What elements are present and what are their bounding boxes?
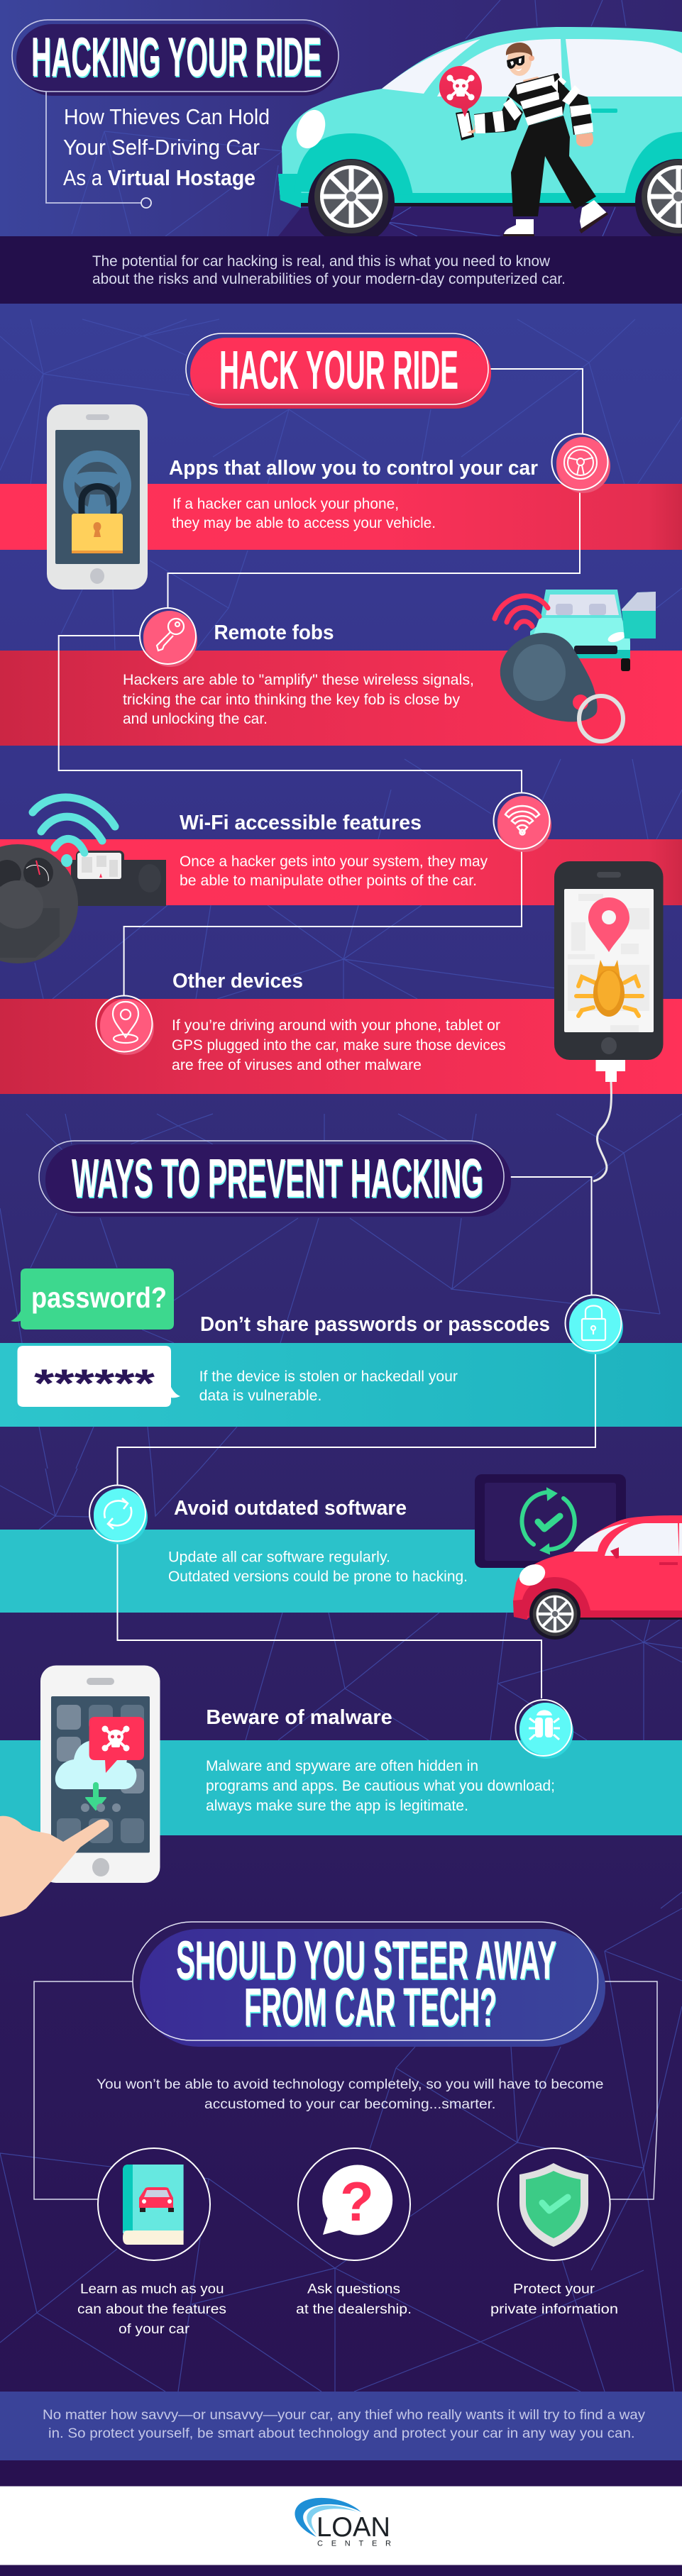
subtitle with bracket line: As a [63, 165, 103, 190]
icon: padlock badge [565, 1295, 623, 1354]
icon: car manual book [98, 2148, 210, 2260]
icon: hidden password bubble [17, 1346, 180, 1407]
text: learn as much as you can: can about the features [77, 2302, 226, 2317]
heading pill: Ways to Prevent Hacking [39, 1141, 511, 1217]
text: learn as much as you can: of your car [119, 2322, 190, 2337]
text: wi-fi accessible features: Wi-Fi accessible features [180, 812, 422, 834]
thief figure with phone [456, 43, 608, 237]
text: car tech intro: accustomed to your car becoming...smarter. [204, 2097, 495, 2112]
text: avoid outdated software: Update all car software regularly. [168, 1549, 390, 1566]
closing strip [0, 2392, 682, 2460]
text: avoid outdated software: Outdated versions could be prone to hacking. [168, 1569, 468, 1585]
text: remote fobs [123, 621, 474, 727]
text: apps that allow you to control your car: they may be able to access your vehicle. [172, 515, 436, 531]
text: beware of malware: Malware and spyware are often hidden in [206, 1758, 478, 1774]
closing strip: No matter how savvy—or unsavvy—your car, any thief who really wants it will try to find a way [43, 2408, 646, 2423]
icon: steering wheel badge [552, 434, 610, 493]
illustration: red car [513, 1515, 682, 1640]
text: protect your private information: Protect your [513, 2282, 595, 2297]
heading pill: Should You Steer Away [133, 1922, 605, 2047]
icon: key badge [140, 608, 197, 667]
band: apps [0, 484, 682, 550]
icon: skull alert balloon [439, 66, 482, 117]
band: malware [0, 1740, 682, 1835]
text: remote fobs: Remote fobs [214, 621, 334, 644]
icon: question speech bubble: ? [340, 2170, 374, 2233]
illustration: update monitor [475, 1474, 626, 1568]
text: apps that allow you to control your car: If a hacker can unlock your phone, [172, 496, 399, 512]
text: remote fobs: tricking the car into thinking the key fob is close by [123, 692, 461, 708]
text: learn as much as you can [77, 2282, 226, 2337]
text: don't share passwords: Don’t share passwords or passcodes [200, 1313, 550, 1336]
connector: prevention path [118, 1177, 595, 1698]
icon: steering wheel phone lock [47, 404, 148, 590]
text: other devices [172, 970, 506, 1073]
text: avoid outdated software [168, 1497, 468, 1585]
text: protect your private information: private information [490, 2302, 618, 2317]
text: learn as much as you can: Learn as much as you [80, 2282, 224, 2297]
icon: hidden password bubble: ****** [34, 1361, 155, 1405]
connector: car tech path [34, 1981, 657, 2199]
text: other devices: are free of viruses and other malware [172, 1057, 422, 1073]
text: beware of malware [206, 1706, 555, 1814]
illustration: dashboard and wifi [0, 797, 166, 963]
text: don't share passwords: data is vulnerable. [199, 1388, 321, 1404]
icon: question speech bubble [298, 2148, 410, 2260]
illustration: car behind key fob [530, 590, 656, 671]
heading pill: Hack Your Ride: HACK YOUR RIDE [219, 340, 458, 401]
text: wi-fi accessible features: Once a hacker gets into your system, they may [180, 853, 488, 870]
text: apps that allow you to control your car [169, 457, 538, 531]
illustration: key fob [500, 633, 623, 741]
footer with Loan Center logo [0, 2486, 682, 2565]
icon: location pin badge [97, 996, 154, 1055]
intro strip [0, 236, 682, 304]
icon: wifi badge [494, 793, 551, 852]
connector: hack your ride path [59, 369, 583, 995]
text: avoid outdated software: Avoid outdated software [174, 1497, 407, 1520]
footer with Loan Center logo: CENTER [317, 2540, 391, 2548]
footer with Loan Center logo: LOAN [317, 2512, 390, 2543]
band: outdated software [0, 1530, 682, 1613]
icon: password speech bubble [11, 1268, 174, 1330]
text: don't share passwords [199, 1313, 550, 1404]
text: wi-fi accessible features [180, 812, 488, 889]
icon: charger and cable [593, 1060, 625, 1181]
title: Hacking Your Ride: HACKING YOUR RIDE [32, 27, 322, 89]
text: car tech intro: You won’t be able to avoid technology completely, so you will have to become [97, 2077, 603, 2092]
text: ask questions: Ask questions [307, 2282, 400, 2297]
icon: password speech bubble: password? [31, 1281, 167, 1314]
subtitle with bracket line: How Thieves Can Hold [64, 104, 270, 129]
text: other devices: Other devices [172, 970, 303, 993]
subtitle with bracket line: Your Self-Driving Car [63, 135, 260, 160]
text: remote fobs: Hackers are able to "amplify" these wireless signals, [123, 672, 474, 688]
text: ask questions: at the dealership. [296, 2302, 412, 2317]
text: ask questions [296, 2282, 412, 2317]
band: wi-fi [0, 839, 682, 905]
illustration: phone with map, pin and bug [554, 861, 663, 1060]
icon: pink wifi signal [495, 596, 548, 628]
text: car tech intro [97, 2077, 603, 2112]
text: protect your private information [490, 2282, 618, 2317]
text: beware of malware: Beware of malware [206, 1706, 392, 1729]
text: remote fobs: and unlocking the car. [123, 711, 268, 727]
band: passwords [0, 1343, 682, 1427]
band: remote fobs [0, 651, 682, 746]
subtitle with bracket line: Virtual Hostage [108, 165, 255, 190]
illustration: pointing hand [0, 1816, 109, 1917]
text: other devices: GPS plugged into the car, make sure those devices [172, 1037, 506, 1054]
band: other devices [0, 999, 682, 1094]
icon: shield [498, 2148, 610, 2260]
intro strip: The potential for car hacking is real, and this is what you need to know [92, 253, 551, 270]
icon: refresh badge [89, 1486, 148, 1544]
icon: bug badge [515, 1700, 573, 1759]
intro strip: about the risks and vulnerabilities of your modern-day computerized car. [92, 271, 566, 287]
illustration: phone with malware download [40, 1666, 160, 1883]
closing strip: in. So protect yourself, be smart about technology and protect your car in any way you can. [48, 2426, 635, 2441]
text: don't share passwords: If the device is stolen or hackedall your [199, 1369, 458, 1385]
text: wi-fi accessible features: be able to manipulate other points of the car. [180, 873, 477, 889]
text: beware of malware: programs and apps. Be cautious what you download; [206, 1778, 555, 1794]
title: Hacking Your Ride: HACKING YOUR RIDE [31, 26, 321, 88]
text: apps that allow you to control your car: Apps that allow you to control your car [169, 457, 538, 480]
title: Hacking Your Ride [12, 20, 339, 96]
text: beware of malware: always make sure the app is legitimate. [206, 1798, 468, 1814]
text: other devices: If you’re driving around with your phone, tablet or [172, 1017, 500, 1034]
subtitle with bracket line [46, 92, 270, 208]
header car illustration [278, 27, 682, 245]
heading pill: Hack Your Ride [186, 333, 491, 409]
